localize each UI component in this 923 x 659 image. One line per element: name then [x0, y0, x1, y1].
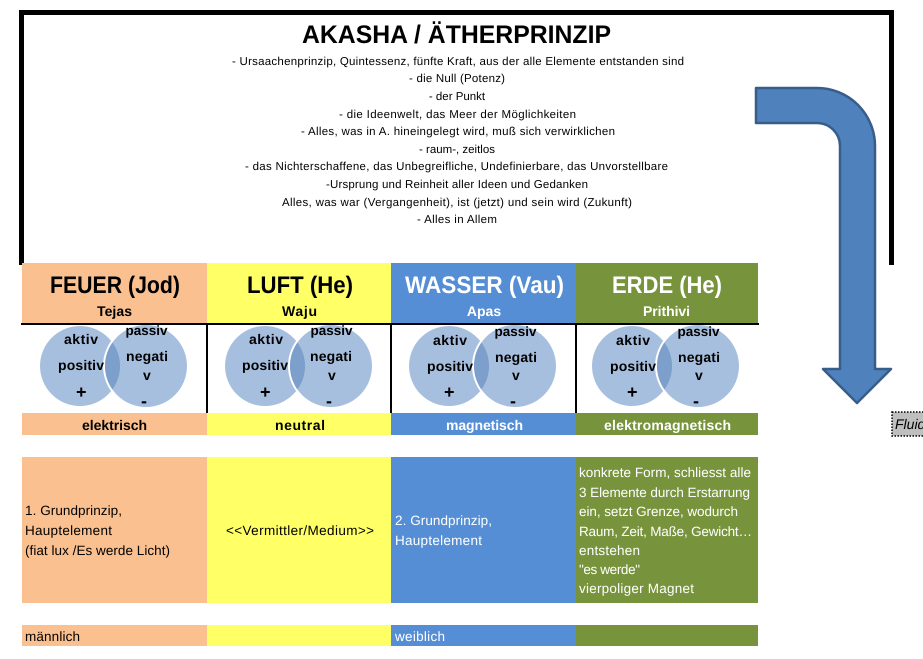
venn diagram: erde: v: [695, 367, 703, 383]
text block: akasha description: - Alles in Allem: [417, 214, 497, 226]
venn diagram: erde: aktiv: [616, 332, 650, 348]
panel: luft header: LUFT (He): [247, 272, 353, 299]
panel: wasser header: [391, 263, 576, 323]
panel: feuer description: [22, 457, 207, 603]
venn diagram: wasser: v: [512, 367, 520, 383]
band: neutral: [207, 413, 391, 435]
panel: erde description: entstehen: [579, 543, 640, 558]
panel: feuer header: FEUER (Jod): [50, 272, 180, 299]
venn diagram: erde: negati: [678, 349, 720, 365]
row: männlich: [22, 625, 207, 646]
label: Fluid cell: [892, 412, 923, 436]
panel: wasser header: WASSER (Vau): [405, 272, 564, 299]
band: elektromagnetisch: elektromagnetisch: [604, 417, 731, 433]
venn diagram: luft: aktiv: [249, 331, 283, 347]
venn diagram: feuer: aktiv: [64, 331, 98, 347]
text block: akasha description: -Ursprung und Reinheit aller Ideen und Gedanken: [326, 179, 588, 191]
band: elektrisch: [22, 413, 207, 435]
text block: akasha description: - raum-, zeitlos: [419, 144, 495, 156]
title: AKASHA / ÄTHERPRINZIP: [302, 21, 611, 49]
venn diagram: erde: [592, 323, 741, 411]
panel: erde description: "es werde": [579, 562, 640, 577]
band: elektrisch: elektrisch: [82, 417, 147, 433]
venn diagram: erde: +: [627, 382, 638, 402]
panel: erde description: ein, setzt Grenze, wodurch: [579, 504, 738, 519]
text block: akasha description: [232, 56, 684, 226]
venn diagram: feuer: negati: [126, 348, 168, 364]
venn diagram: wasser: [409, 323, 558, 411]
venn diagram: feuer: v: [143, 367, 151, 383]
panel: luft header: Waju: [282, 303, 317, 319]
panel: erde description: Raum, Zeit, Maße, Gewicht…: [579, 524, 752, 539]
venn diagram: erde: positiv: [610, 358, 656, 374]
venn diagram: wasser: +: [444, 382, 455, 402]
text block: akasha description: - die Ideenwelt, das Meer der Möglichkeiten: [339, 109, 576, 121]
panel: erde header: [576, 263, 758, 323]
venn diagram: erde: -: [693, 391, 699, 411]
panel: feuer description: Hauptelement: [25, 523, 112, 538]
panel: luft description: [207, 457, 391, 603]
band: elektromagnetisch: [576, 413, 758, 435]
venn diagram: wasser: negati: [495, 349, 537, 365]
panel: feuer header: [22, 263, 207, 323]
panel: wasser description: 2. Grundprinzip,: [395, 513, 492, 528]
row: erde empty: [576, 625, 758, 646]
band: magnetisch: [391, 413, 576, 435]
panel: wasser header: Apas: [467, 303, 501, 319]
venn diagram: erde: passiv: [677, 324, 720, 339]
panel: luft description: <<Vermittler/Medium>>: [226, 523, 374, 538]
panel: erde header: ERDE (He): [612, 272, 722, 299]
venn diagram: luft: -: [326, 391, 332, 411]
panel: feuer description: 1. Grundprinzip,: [25, 503, 122, 518]
venn diagram: wasser: passiv: [494, 324, 537, 339]
panel: wasser description: [391, 457, 576, 603]
text block: akasha description: - Alles, was in A. hineingelegt wird, muß sich verwirklichen: [301, 126, 615, 138]
venn diagram: luft: passiv: [310, 323, 353, 338]
panel: wasser description: Hauptelement: [395, 533, 482, 548]
venn diagram: wasser: aktiv: [433, 332, 467, 348]
text block: akasha description: - der Punkt: [429, 91, 486, 103]
row: weiblich: [391, 625, 576, 646]
text block: akasha description: Alles, was war (Vergangenheit), ist (jetzt) und sein wird (Zukunft): [282, 197, 632, 209]
panel: erde header: Prithivi: [643, 303, 690, 319]
band: magnetisch: magnetisch: [446, 417, 523, 433]
venn diagram: luft: positiv: [242, 357, 288, 373]
text block: akasha description: - Ursaachenprinzip, Quintessenz, fünfte Kraft, aus der alle Elemente entstanden sind: [232, 56, 684, 68]
row: männlich: männlich: [25, 629, 80, 644]
venn diagram: wasser: positiv: [427, 358, 473, 374]
venn diagram: feuer: positiv: [58, 357, 104, 373]
panel: luft header: [207, 263, 391, 323]
panel: erde description: 3 Elemente durch Erstarrung: [579, 485, 750, 500]
text block: akasha description: - die Null (Potenz): [409, 73, 505, 85]
text block: akasha description: - das Nichterschaffene, das Unbegreifliche, Undefinierbare, das Unvorstellbare: [245, 161, 668, 173]
panel: akasha frame: [22, 12, 892, 265]
panel: feuer description: (fiat lux /Es werde Licht): [25, 543, 170, 558]
arrow: bent downward arrow: [756, 88, 891, 403]
venn diagram: luft: [225, 323, 374, 411]
venn diagram: feuer: [40, 323, 189, 411]
row: weiblich: weiblich: [394, 629, 445, 644]
panel: erde description: vierpoliger Magnet: [579, 581, 694, 596]
panel: erde description: [576, 457, 758, 603]
venn diagram: feuer: +: [76, 382, 87, 402]
venn diagram: luft: negati: [310, 348, 352, 364]
venn diagram: luft: v: [328, 367, 336, 383]
venn diagram: feuer: -: [141, 391, 147, 411]
row: luft empty: [207, 625, 391, 646]
venn diagram: wasser: -: [510, 391, 516, 411]
panel: erde description: konkrete Form, schliesst alle: [579, 465, 751, 480]
venn diagram: luft: +: [260, 382, 271, 402]
panel: feuer header: Tejas: [97, 303, 132, 319]
venn diagram: feuer: passiv: [125, 323, 168, 338]
band: neutral: neutral: [275, 417, 325, 433]
